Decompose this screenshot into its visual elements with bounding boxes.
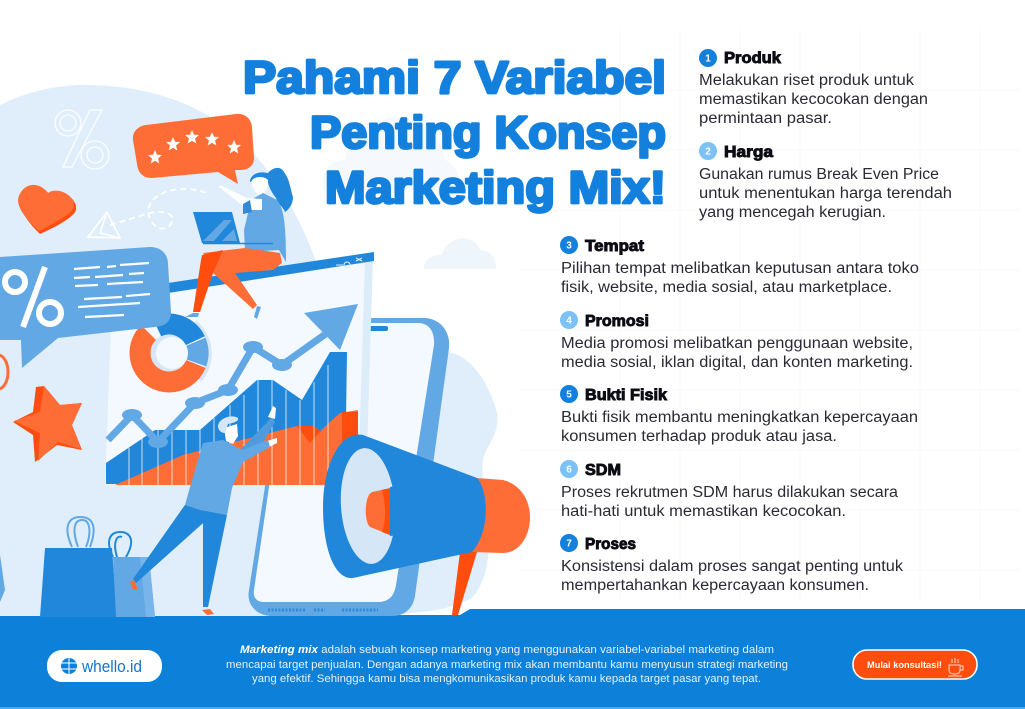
- item 2: Harga: [699, 142, 952, 221]
- speech bubble: percent offer: [0, 247, 171, 368]
- icon: paper plane: [88, 189, 207, 238]
- item 1: Produk: permintaan pasar.: [699, 110, 832, 127]
- item 1: Produk: [699, 49, 928, 127]
- item 4: Promosi: Media promosi melibatkan penggunaan website,: [561, 335, 913, 352]
- item 3: Tempat: Tempat: [585, 238, 644, 255]
- footer description: mencapai target penjualan. Dengan adanya marketing mix akan membantu kamu menyusun strategi marketing: [226, 659, 788, 671]
- icon: orange ring: [0, 355, 8, 389]
- item 3: Tempat: Pilihan tempat melibatkan keputusan antara toko: [561, 260, 919, 277]
- item 2: Harga: Harga: [724, 144, 773, 161]
- item 4: Promosi: Promosi: [585, 313, 649, 330]
- item 5: Bukti Fisik: konsumen terhadap produk atau jasa.: [561, 428, 837, 445]
- item 4: Promosi: media sosial, iklan digital, dan konten marketing.: [561, 354, 913, 371]
- background blobs: [0, 85, 497, 616]
- item 6: SDM: Proses rekrutmen SDM harus dilakukan secara: [561, 484, 898, 501]
- speech bubble: stars: [133, 114, 254, 184]
- footer content: [0, 644, 1025, 709]
- item 7: Proses: 7: [566, 538, 572, 550]
- item 7: Proses: mempertahankan kepercayaan konsumen.: [561, 577, 869, 594]
- megaphone: [323, 435, 530, 615]
- icon: outlined percent: [55, 110, 109, 169]
- footer band: [0, 609, 1025, 709]
- browser window: [105, 252, 374, 485]
- phone: [248, 318, 449, 616]
- footer description: [226, 644, 788, 685]
- item 1: Produk: 1: [705, 54, 711, 64]
- title: [243, 52, 666, 213]
- item 4: Promosi: 4: [566, 316, 572, 326]
- area chart: [106, 352, 358, 485]
- item 5: Bukti Fisik: Bukti fisik membantu meningkatkan kepercayaan: [561, 409, 918, 426]
- icon: star: [13, 386, 82, 462]
- icon: heart: [18, 185, 76, 234]
- donut chart: [140, 322, 210, 382]
- cloud: [424, 238, 496, 269]
- item 6: SDM: 6: [566, 464, 572, 476]
- item 7: Proses: [560, 534, 903, 594]
- item 3: Tempat: [560, 236, 919, 296]
- shopping bags: [0, 505, 203, 617]
- call to action button: [853, 650, 977, 679]
- footer logo: whello.id: [47, 650, 162, 682]
- trend line with arrow: [108, 304, 358, 448]
- item 3: Tempat: 3: [566, 240, 572, 252]
- call to action button: Mulai konsultasi!: [867, 660, 942, 671]
- item 5: Bukti Fisik: 5: [566, 390, 572, 400]
- item 7: Proses: Konsistensi dalam proses sangat penting untuk: [561, 558, 903, 575]
- item 1: Produk: memastikan kecocokan dengan: [699, 91, 928, 108]
- item 2: Harga: Gunakan rumus Break Even Price: [699, 166, 939, 183]
- item 2: Harga: 2: [705, 146, 711, 158]
- man: [130, 406, 277, 615]
- item 6: SDM: SDM: [585, 462, 621, 479]
- item 5: Bukti Fisik: Bukti Fisik: [585, 387, 667, 404]
- item 6: SDM: hati-hati untuk memastikan kecocokan.: [561, 503, 846, 520]
- title: Marketing Mix!: [325, 162, 666, 213]
- footer description: Marketing mix adalah sebuah konsep marketing yang menggunakan variabel-variabel marketing dalam: [240, 644, 774, 656]
- item 2: Harga: untuk menentukan harga terendah: [699, 185, 952, 202]
- item 2: Harga: yang mencegah kerugian.: [699, 204, 886, 221]
- title: Penting Konsep: [310, 107, 666, 158]
- item 5: Bukti Fisik: [560, 385, 918, 445]
- faint cloud behind title: [323, 117, 459, 190]
- item 1: Produk: Produk: [724, 50, 781, 67]
- item 3: Tempat: fisik, website, media sosial, atau marketplace.: [561, 279, 892, 296]
- item 1: Produk: Melakukan riset produk untuk: [699, 72, 914, 89]
- item 7: Proses: Proses: [585, 536, 636, 553]
- item 4: Promosi: [560, 311, 913, 371]
- title: Pahami 7 Variabel: [243, 52, 666, 103]
- item 6: SDM: [560, 460, 898, 520]
- footer description: yang efektif. Sehingga kamu bisa mengkomunikasikan produk kamu kepada target pasar yang tepat.: [252, 673, 761, 685]
- footer logo: whello.id: whello.id: [81, 657, 142, 676]
- woman with laptop: [185, 168, 293, 319]
